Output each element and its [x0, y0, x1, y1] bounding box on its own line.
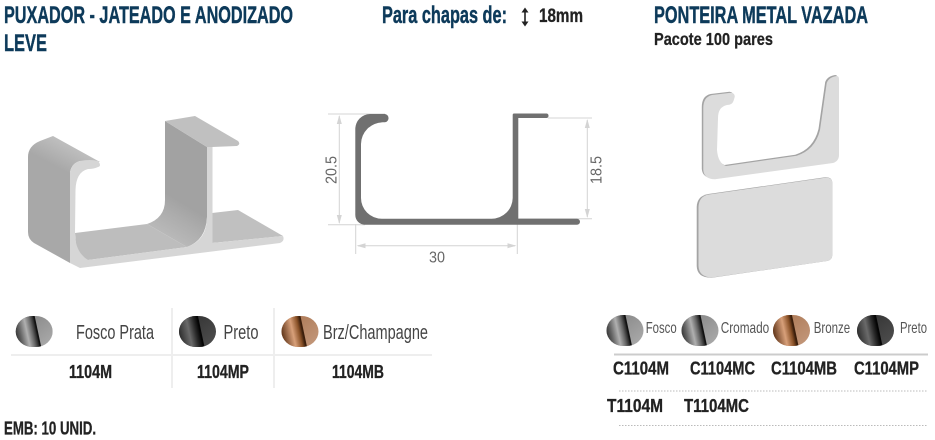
end cap illustration: [697, 75, 839, 278]
label: brz champagne: Brz/Champagne: [323, 322, 428, 344]
profile section: [355, 114, 580, 225]
swatch: preto cap: [856, 314, 894, 347]
dimension lines: [328, 114, 592, 254]
heading: para chapas de: Para chapas de:: [382, 2, 507, 29]
icon: thickness arrow: [522, 8, 528, 26]
right top lip: [165, 116, 239, 147]
swatch: bronze champagne: [280, 315, 318, 348]
label: bronze: Bronze: [814, 320, 850, 337]
dimension 30: 30: [429, 250, 445, 267]
swatch: fosco: [606, 314, 644, 347]
left side face: [28, 136, 100, 263]
label: cromado: Cromado: [721, 320, 769, 337]
title: puxador: LEVE: [4, 30, 47, 57]
code: C1104M: C1104M: [613, 358, 669, 378]
code: T1104MC: T1104MC: [684, 396, 749, 416]
swatch: preto: [178, 315, 216, 348]
title: puxador: PUXADOR - JATEADO E ANODIZADO: [4, 2, 293, 29]
title: puxador: [4, 2, 293, 57]
technical drawing: cross-section: [324, 114, 606, 267]
3D profile illustration: [28, 116, 284, 268]
code: C1104MC: C1104MC: [690, 358, 755, 378]
code: T1104M: T1104M: [607, 396, 663, 416]
code: C1104MP: C1104MP: [854, 358, 919, 378]
swatch: fosco prata: [15, 315, 53, 348]
dimension 20.5: 20.5: [324, 156, 340, 184]
end cap upper piece: [702, 75, 839, 179]
text: packaging: EMB: 10 UNID.: [4, 418, 96, 438]
code: 1104MB: 1104MB: [332, 362, 384, 382]
right lower plate: [212, 210, 283, 243]
rear wall flat: [147, 121, 207, 247]
floor: [75, 224, 187, 260]
finish table grid: [11, 308, 432, 388]
label: preto: Preto: [224, 322, 258, 344]
swatch: cromado: [680, 314, 718, 347]
label: fosco: Fosco: [646, 320, 677, 337]
subtitle: pacote: Pacote 100 pares: [654, 29, 773, 49]
end cap lower piece: [697, 177, 832, 278]
dimension arrowheads: [337, 115, 590, 248]
code: C1104MB: C1104MB: [771, 358, 837, 378]
text: 18mm: 18mm: [539, 6, 583, 27]
code: 1104M: 1104M: [69, 362, 112, 382]
label: fosco prata: Fosco Prata: [76, 322, 155, 344]
swatch: bronze: [772, 314, 810, 347]
front face: [70, 147, 284, 268]
dimension 18.5: 18.5: [588, 156, 606, 184]
code: 1104MP: 1104MP: [197, 362, 249, 382]
